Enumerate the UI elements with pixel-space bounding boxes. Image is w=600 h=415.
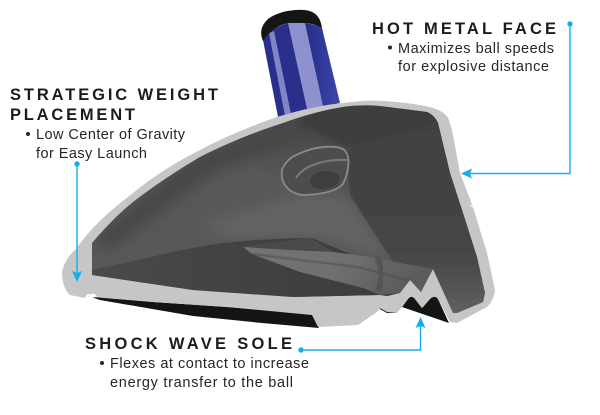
lower sole area (92, 238, 400, 300)
heading: strategic weight placement: PLACEMENT (10, 106, 135, 124)
heading: shock wave sole: SHOCK WAVE SOLE (85, 335, 292, 353)
callout: hot metal face (372, 20, 573, 178)
crown upper area (85, 100, 495, 320)
dark cavity (85, 100, 495, 320)
crown upper edge shade (92, 100, 343, 250)
crown boss with hole (282, 147, 348, 195)
text: weight placement details (26, 127, 186, 162)
heading: strategic weight placement (10, 86, 218, 124)
icon: blue hosel (261, 10, 340, 117)
heading: hot metal face: HOT METAL FACE (372, 20, 556, 38)
face grooves (457, 145, 487, 246)
top dark band (300, 105, 440, 148)
text: shock wave sole details: energy transfer to the ball (110, 375, 293, 391)
small notch in shell (88, 294, 97, 298)
silver shell (62, 101, 495, 327)
text: hot metal face details (388, 41, 554, 75)
arrow: to club face (461, 21, 573, 178)
text: shock wave sole details (100, 356, 309, 391)
text: weight placement details: for Easy Launch (36, 146, 147, 162)
club head cross-section (62, 100, 495, 327)
text: hot metal face details: for explosive distance (398, 59, 549, 75)
right face area (347, 122, 490, 318)
text: hot metal face details: Maximizes ball speeds (398, 41, 554, 57)
ridge highlight (220, 197, 372, 246)
text: shock wave sole details: Flexes at contact to increase (110, 356, 309, 372)
text: weight placement details: Low Center of Gravity (36, 127, 186, 143)
arrow: to weight (72, 161, 82, 282)
callout: shock wave sole (85, 317, 426, 391)
heading: strategic weight placement: STRATEGIC WEIGHT (10, 86, 218, 104)
sole ribs (243, 238, 433, 295)
icon: black sole underside (88, 296, 449, 328)
arrow: to sole (298, 317, 426, 353)
callout: strategic weight placement (10, 86, 218, 282)
